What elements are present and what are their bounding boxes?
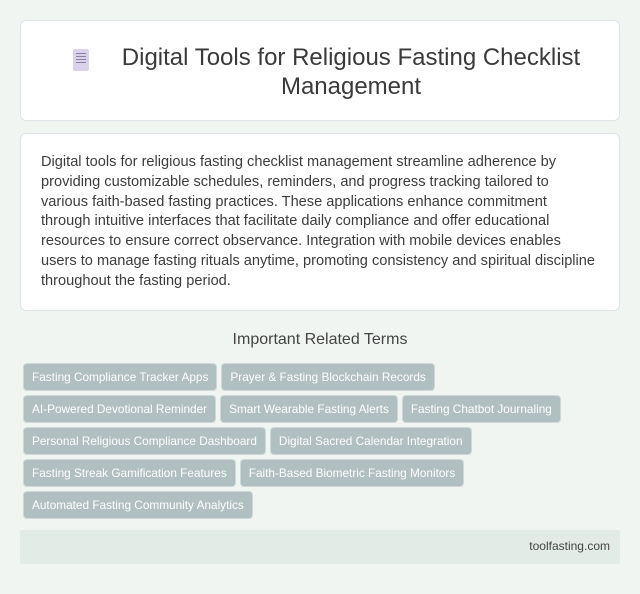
description text: Digital tools for religious fasting checklist management streamline adherence by providing customizable schedules, reminders, and progress tracking tailored to various faith-based fasting practices. These applications enhance commitment through intuitive interfaces that facilitate daily compliance and offer educational resources to ensure correct observance. Integration with mobile devices enables users to manage fasting rituals anytime, promoting consistency and spiritual discipline throughout the fasting period. [41,154,595,289]
tag list [23,363,561,519]
tag list: Digital Sacred Calendar Integration [279,434,463,448]
footer text: toolfasting.com [529,539,610,553]
tag list: Automated Fasting Community Analytics [32,498,244,512]
footer [20,530,620,564]
tag list: Fasting Chatbot Journaling [411,402,552,416]
tag list: Smart Wearable Fasting Alerts [229,402,389,416]
description card [20,133,620,311]
related terms heading: Important Related Terms [233,331,407,348]
title card [20,20,620,121]
tag list: AI-Powered Devotional Reminder [32,402,207,416]
tag list: Prayer & Fasting Blockchain Records [230,370,426,384]
tag list: Fasting Streak Gamification Features [32,466,227,480]
title: Digital Tools for Religious Fasting Checklist Management [122,44,580,100]
tag list: Faith-Based Biometric Fasting Monitors [249,466,455,480]
tag list: Personal Religious Compliance Dashboard [32,434,257,448]
icon: document [73,49,89,71]
tag list: Fasting Compliance Tracker Apps [32,370,208,384]
